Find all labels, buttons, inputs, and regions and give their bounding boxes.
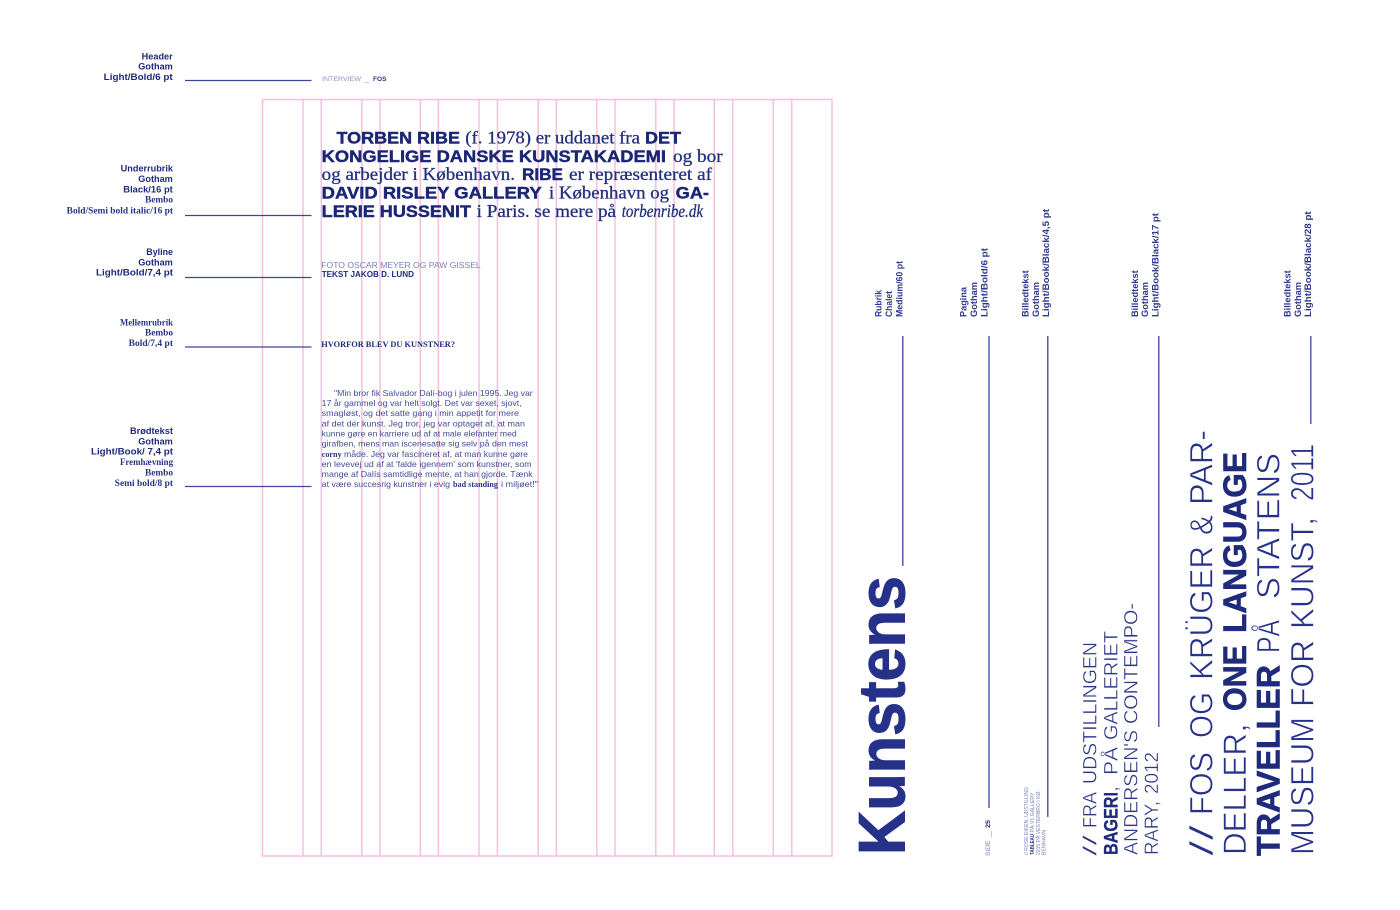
label: brødtekst spec: Fremhævning bbox=[120, 457, 173, 467]
large image caption: FOS bbox=[1184, 752, 1220, 815]
intro heading text: GA- bbox=[676, 184, 709, 202]
panel: pink column grid bbox=[262, 100, 832, 856]
page header: __ bbox=[363, 76, 370, 83]
label: underrubrik spec: Bold/Semi bold italic/16 pt bbox=[67, 205, 173, 215]
subheading: HVORFOR BLEV DU KUNSTNER? bbox=[321, 340, 455, 349]
label: mellemrubrik spec bbox=[120, 317, 174, 348]
intro heading text: DAVID RISLEY GALLERY bbox=[322, 184, 542, 202]
medium image caption: PÅ bbox=[1100, 747, 1123, 775]
intro heading text: KONGELIGE DANSKE KUNSTAKADEMI bbox=[322, 147, 666, 166]
leader line: pagina bbox=[988, 336, 990, 808]
label: underrubrik spec bbox=[67, 164, 174, 215]
medium image caption: RARY, bbox=[1141, 801, 1163, 855]
label: billedtekst 28 pt spec: Gotham bbox=[1293, 282, 1303, 317]
label: rubrik spec: Medium/60 pt bbox=[894, 261, 904, 317]
body text bbox=[322, 388, 538, 489]
intro heading text: og arbejder i København. bbox=[322, 164, 515, 184]
label: billedtekst 17 pt spec: Gotham bbox=[1140, 282, 1150, 317]
small image caption: PÅ V1 GALLERY bbox=[1029, 792, 1036, 832]
medium image caption: BAGERI bbox=[1101, 792, 1123, 855]
label: brødtekst spec: Brødtekst bbox=[130, 426, 173, 436]
label: billedtekst 17 pt spec: Billedtekst bbox=[1130, 270, 1140, 317]
body text: kunne gøre en karriere ud af at male elefanter med bbox=[322, 428, 517, 438]
label: billedtekst 4,5 pt spec: Gotham bbox=[1031, 282, 1041, 317]
leader line: underrubrik bbox=[185, 214, 312, 216]
body text: i miljøet!" bbox=[501, 479, 538, 489]
large image caption: KRÜGER bbox=[1184, 546, 1220, 680]
large image caption: OG bbox=[1184, 692, 1220, 738]
leader line: mellemrubrik bbox=[185, 346, 312, 348]
leader line: billedtekst 17 pt bbox=[1158, 336, 1160, 727]
leader line: header bbox=[185, 80, 312, 82]
label: billedtekst 4,5 pt spec: Light/Book/Black/4,5 pt bbox=[1041, 209, 1051, 317]
label: pagina spec: Pagina bbox=[959, 286, 969, 317]
body text: corny bbox=[322, 450, 342, 459]
large image caption: PAR- bbox=[1184, 430, 1220, 505]
label: brødtekst spec: Semi bold/8 pt bbox=[115, 478, 173, 488]
label: byline spec bbox=[96, 247, 173, 278]
label: byline spec: Gotham bbox=[138, 257, 173, 267]
intro heading text bbox=[322, 128, 723, 221]
medium image caption: FRA bbox=[1080, 792, 1102, 828]
medium image caption: UDSTILLINGEN bbox=[1080, 642, 1102, 784]
body text: en levevej ud af at 'falde igennem' som kunstner, som bbox=[322, 459, 532, 469]
intro heading text: er repræsenteret af bbox=[569, 164, 712, 184]
label: mellemrubrik spec: Mellemrubrik bbox=[120, 317, 173, 327]
label: pagina spec: Light/Bold/6 pt bbox=[979, 248, 989, 317]
label: underrubrik spec: Underrubrik bbox=[121, 164, 174, 174]
large image caption: TRAVELLER bbox=[1250, 665, 1286, 856]
leader line: byline bbox=[185, 276, 312, 278]
small image caption: 2015 PÅ VESTERBRO I KØ- bbox=[1035, 790, 1042, 855]
body text: smagløst, og det satte gang i min appetit for mere bbox=[322, 408, 519, 418]
label: billedtekst 4,5 pt spec: Billedtekst bbox=[1021, 270, 1031, 317]
page header bbox=[322, 76, 387, 83]
large image caption: FOR bbox=[1284, 640, 1320, 707]
large image caption: & bbox=[1184, 515, 1220, 535]
label: billedtekst 28 pt spec bbox=[1283, 211, 1313, 317]
body text: bad standing bbox=[453, 480, 499, 489]
medium image caption: ANDERSEN'S bbox=[1120, 730, 1142, 855]
pagina: SIDE 25: SIDE bbox=[985, 840, 992, 856]
label: pagina spec: Gotham bbox=[969, 282, 979, 317]
medium image caption: GALLERIET bbox=[1101, 631, 1123, 740]
large image caption: PÅ bbox=[1250, 620, 1286, 653]
label: billedtekst 17 pt spec bbox=[1130, 213, 1160, 317]
intro heading text: TORBEN RIBE bbox=[336, 129, 460, 148]
label: mellemrubrik spec: Bembo bbox=[145, 328, 174, 338]
byline: TEKST JAKOB D. LUND bbox=[322, 270, 414, 279]
intro heading text: og bor bbox=[673, 146, 723, 166]
intro heading text: (f. 1978) er uddanet fra bbox=[465, 128, 640, 148]
large image caption: STATENS bbox=[1250, 453, 1286, 599]
label: rubrik spec: Chalet bbox=[884, 291, 894, 317]
large image caption bbox=[1184, 430, 1320, 856]
large image caption: DELLER bbox=[1217, 733, 1253, 855]
intro heading text: RIBE bbox=[522, 165, 563, 184]
large image caption: 2011 bbox=[1284, 444, 1320, 501]
intro heading text: LERIE HUSSENIT bbox=[322, 202, 472, 221]
intro heading text: torbenribe.dk bbox=[622, 201, 704, 221]
label: rubrik spec: Rubrik bbox=[874, 289, 884, 317]
label: brødtekst spec bbox=[91, 426, 174, 488]
label: underrubrik spec: Black/16 pt bbox=[123, 184, 173, 194]
page header: INTERVIEW bbox=[322, 76, 362, 83]
body text: af det dér kunst. Jeg tror, jeg var optaget af, at man bbox=[322, 418, 525, 428]
leader line: brødtekst bbox=[185, 486, 312, 488]
medium image caption: , bbox=[1101, 786, 1123, 792]
label: rubrik spec bbox=[874, 261, 904, 317]
pagina: SIDE 25: __ bbox=[985, 831, 992, 838]
body text: mange af Dalís samtidlige mente, at han gjorde. Tænk bbox=[322, 469, 534, 479]
small image caption: TABLEAU bbox=[1030, 834, 1036, 855]
large image caption: MUSEUM bbox=[1284, 717, 1320, 855]
large image caption: KUNST, bbox=[1284, 517, 1320, 629]
body text: 17 år gammel og var helt solgt. Det var sexet, sjovt, bbox=[322, 398, 522, 408]
body text: måde. Jeg var fascineret af, at man kunne gøre bbox=[344, 449, 528, 459]
label: pagina spec bbox=[959, 248, 989, 317]
leader line: billedtekst 28 pt bbox=[1310, 336, 1312, 424]
label: billedtekst 28 pt spec: Billedtekst bbox=[1283, 270, 1293, 317]
medium image caption: 2012 bbox=[1141, 752, 1163, 794]
leader line: rubrik bbox=[902, 336, 904, 566]
label: byline spec: Byline bbox=[146, 247, 173, 257]
medium image caption bbox=[1080, 603, 1163, 856]
label: header spec: Light/Bold/6 pt bbox=[104, 72, 173, 82]
intro heading text: i Paris. se mere på bbox=[477, 201, 616, 221]
label: brødtekst spec: Light/Book/ 7,4 pt bbox=[91, 447, 173, 457]
title: Kunstens: Kunstens bbox=[845, 576, 918, 855]
label: billedtekst 4,5 pt spec bbox=[1021, 209, 1051, 317]
small image caption: BENHAVN bbox=[1042, 830, 1048, 855]
body text: "Min bror fik Salvador Dalí-bog i julen 1995. Jeg var bbox=[334, 388, 533, 398]
byline bbox=[321, 260, 481, 279]
label: header spec bbox=[104, 52, 173, 82]
medium image caption: // bbox=[1080, 834, 1102, 856]
label: mellemrubrik spec: Bold/7,4 pt bbox=[129, 338, 173, 348]
page header: FOS bbox=[373, 76, 387, 83]
large image caption: // bbox=[1184, 823, 1220, 856]
intro heading text: DET bbox=[645, 129, 682, 148]
pagina: SIDE 25 bbox=[985, 820, 992, 856]
byline: FOTO OSCAR MEYER OG PAW GISSEL bbox=[321, 260, 481, 270]
label: underrubrik spec: Bembo bbox=[145, 195, 174, 205]
label: billedtekst 17 pt spec: Light/Book/Black/17 pt bbox=[1150, 213, 1160, 317]
leader line: billedtekst 4,5 pt bbox=[1047, 336, 1049, 817]
large image caption: LANGUAGE bbox=[1217, 452, 1253, 633]
small image caption: // ROSE EIKEN, UDSTILLING bbox=[1024, 787, 1030, 855]
label: billedtekst 28 pt spec: Light/Book/Black/28 pt bbox=[1303, 211, 1313, 317]
large image caption: ONE bbox=[1217, 645, 1253, 711]
label: brødtekst spec: Bembo bbox=[145, 468, 174, 478]
label: header spec: Gotham bbox=[138, 62, 173, 72]
label: underrubrik spec: Gotham bbox=[138, 174, 173, 184]
pagina: SIDE 25: 25 bbox=[985, 820, 992, 828]
label: byline spec: Light/Bold/7,4 pt bbox=[96, 268, 173, 278]
medium image caption: CONTEMPO- bbox=[1120, 603, 1142, 724]
body text: at være succesrig kunstner i evig bbox=[322, 479, 450, 489]
large image caption: , bbox=[1217, 723, 1253, 733]
label: brødtekst spec: Gotham bbox=[138, 436, 173, 446]
body text: girafben, mens man iscenesatte sig selv på den mest bbox=[322, 439, 529, 449]
label: header spec: Header bbox=[142, 52, 173, 62]
small image caption bbox=[1024, 787, 1048, 855]
intro heading text: i København og bbox=[549, 182, 669, 202]
